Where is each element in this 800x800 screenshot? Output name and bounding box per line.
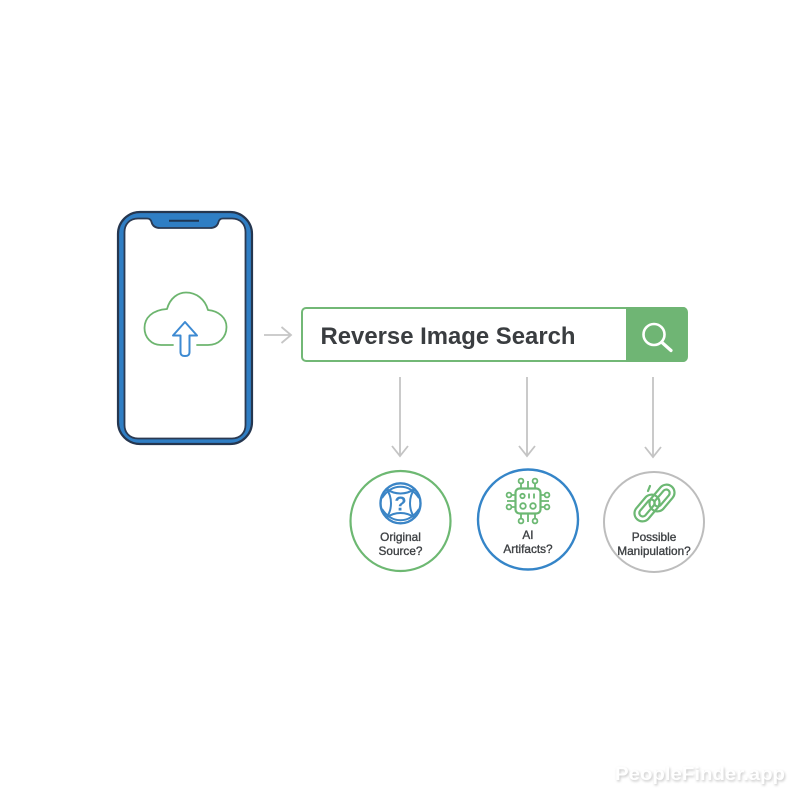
- arrow: to original source: [392, 377, 408, 456]
- icon: broken chain link: [631, 481, 678, 525]
- icon: cloud upload: [144, 292, 226, 356]
- label: Original: [380, 530, 421, 544]
- label: Source?: [379, 544, 423, 558]
- icon: globe question: ?: [394, 494, 407, 516]
- arrow: to AI artifacts: [519, 377, 535, 456]
- label: AI: [522, 528, 534, 542]
- circle: possible manipulation: [604, 472, 704, 572]
- arrow: to possible manipulation: [645, 377, 661, 457]
- arrow: phone to search: [264, 327, 291, 343]
- circle: original source: [350, 471, 450, 571]
- label: Artifacts?: [503, 542, 553, 556]
- circle: AI artifacts: [478, 470, 578, 570]
- search button: [626, 307, 687, 362]
- icon: AI chip: [507, 479, 549, 523]
- label: Possible: [632, 530, 677, 544]
- search label: Reverse Image Search: [320, 323, 576, 350]
- icon: smartphone: [118, 212, 252, 444]
- label: Manipulation?: [617, 544, 691, 558]
- watermark: PeopleFinder.app: [615, 763, 785, 784]
- watermark: PeopleFinder.app: [616, 764, 786, 786]
- search bar: [302, 307, 687, 362]
